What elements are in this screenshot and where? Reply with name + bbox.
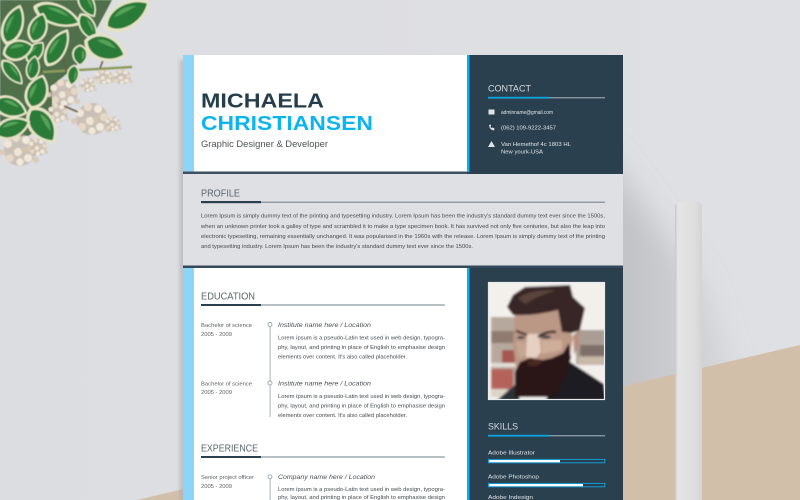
education entry 2 [201, 381, 445, 419]
plant: leaves and flowers [0, 0, 157, 166]
beard [515, 343, 571, 397]
panel: sidebar [467, 268, 623, 500]
experience entry [201, 475, 445, 500]
education entry 1: Lorem ipsum is a pseudo-Latin text used in web design, typogra- [278, 336, 445, 342]
education entry 2: elements over content. It's also called placeholder. [278, 413, 407, 419]
skill: photoshop [488, 474, 605, 487]
face [513, 310, 573, 368]
icon: phone [489, 124, 494, 130]
panel: profile [183, 174, 623, 268]
education entry 1: phy, layout, and printing in place of English to emphasise design [278, 345, 445, 351]
portrait photo [487, 281, 606, 401]
glass rod [675, 201, 702, 500]
icon: mail [488, 110, 494, 114]
contact heading: CONTACT [488, 84, 531, 94]
name: Christiansen: CHRISTIANSEN [201, 113, 373, 135]
header left accent [183, 55, 194, 172]
name: Michaela: MICHAELA [201, 90, 324, 112]
experience entry: Senior project officer [201, 475, 254, 481]
panel: main column [183, 268, 467, 500]
address: Van Hemethof 4c 1803 HL [501, 142, 571, 148]
address line 2: New yourk-USA [501, 150, 544, 156]
resume document [183, 55, 623, 500]
contact rule [488, 97, 605, 99]
skills heading: SKILLS [488, 422, 518, 432]
education entry 2: 2005 - 2009 [201, 390, 232, 396]
education entry 1: Bachelor of science [201, 323, 252, 329]
education entry 1: Institute name here / Location [278, 323, 372, 329]
panel: contact [467, 55, 623, 174]
timeline: experience [268, 475, 272, 500]
skill: illustrator [488, 450, 605, 463]
skills rule [488, 435, 605, 437]
experience heading: EXPERIENCE [201, 444, 258, 454]
experience entry: 2005 - 2009 [201, 484, 232, 490]
document shadow on wall [623, 169, 724, 386]
education heading: EDUCATION [201, 292, 255, 302]
education entry 1 [201, 323, 445, 360]
profile rule [201, 201, 605, 203]
education entry 1: 2005 - 2009 [201, 332, 232, 338]
job title: Graphic Designer & Developer [201, 139, 328, 149]
education entry 2: Bachelor of science [201, 381, 252, 387]
jacket [545, 362, 606, 401]
icon: location [488, 141, 495, 147]
education entry 2: Institute name here / Location [278, 381, 372, 387]
phone: (062) 109-9222-3457 [501, 125, 556, 131]
kraft paper surface [137, 345, 800, 500]
timeline: education [268, 322, 272, 417]
profile text: Lorem Ipsum is simply dummy text of the printing and typesetting industry. Lorem Ipsum has been the industry's standard dummy text ever since the 1500s, [201, 214, 605, 220]
hair [507, 285, 585, 333]
skill: illustrator: Adobe Illustrator [488, 450, 535, 456]
profile text: when an unknown printer took a galley of type and scrambled it to make a type specimen book. It has survived not only five centuries, but also the leap into [201, 224, 605, 230]
education entry 2: phy, layout, and printing in place of English to emphasise design [278, 403, 445, 409]
experience entry: Lorem ipsum is a pseudo-Latin text used in web design, typogra- [278, 487, 445, 493]
header panel [183, 55, 467, 172]
profile text: and typesetting industry. Lorem Ipsum has been the industry's standard dummy text ever since the 1500s. [201, 244, 473, 250]
profile text [201, 214, 605, 250]
education entry 2: Lorem ipsum is a pseudo-Latin text used in web design, typogra- [278, 394, 445, 400]
experience rule [201, 456, 445, 458]
brows and eyes [516, 331, 527, 335]
profile text: electronic typesetting, remaining essentially unchanged. It was popularised in the 1960s with the release. Lorem Ipsum is simply dummy text of the printing [201, 234, 605, 240]
education entry 1: elements over content. It's also called placeholder. [278, 354, 407, 360]
skill: photoshop: Adobe Photoshop [488, 474, 539, 480]
header bottom rule [183, 172, 467, 174]
experience entry: Company name here / Location [278, 475, 376, 481]
email: adminname@gmail.com [501, 110, 553, 116]
profile heading: PROFILE [201, 188, 240, 200]
education rule [201, 304, 445, 306]
document left shadow [180, 60, 185, 500]
